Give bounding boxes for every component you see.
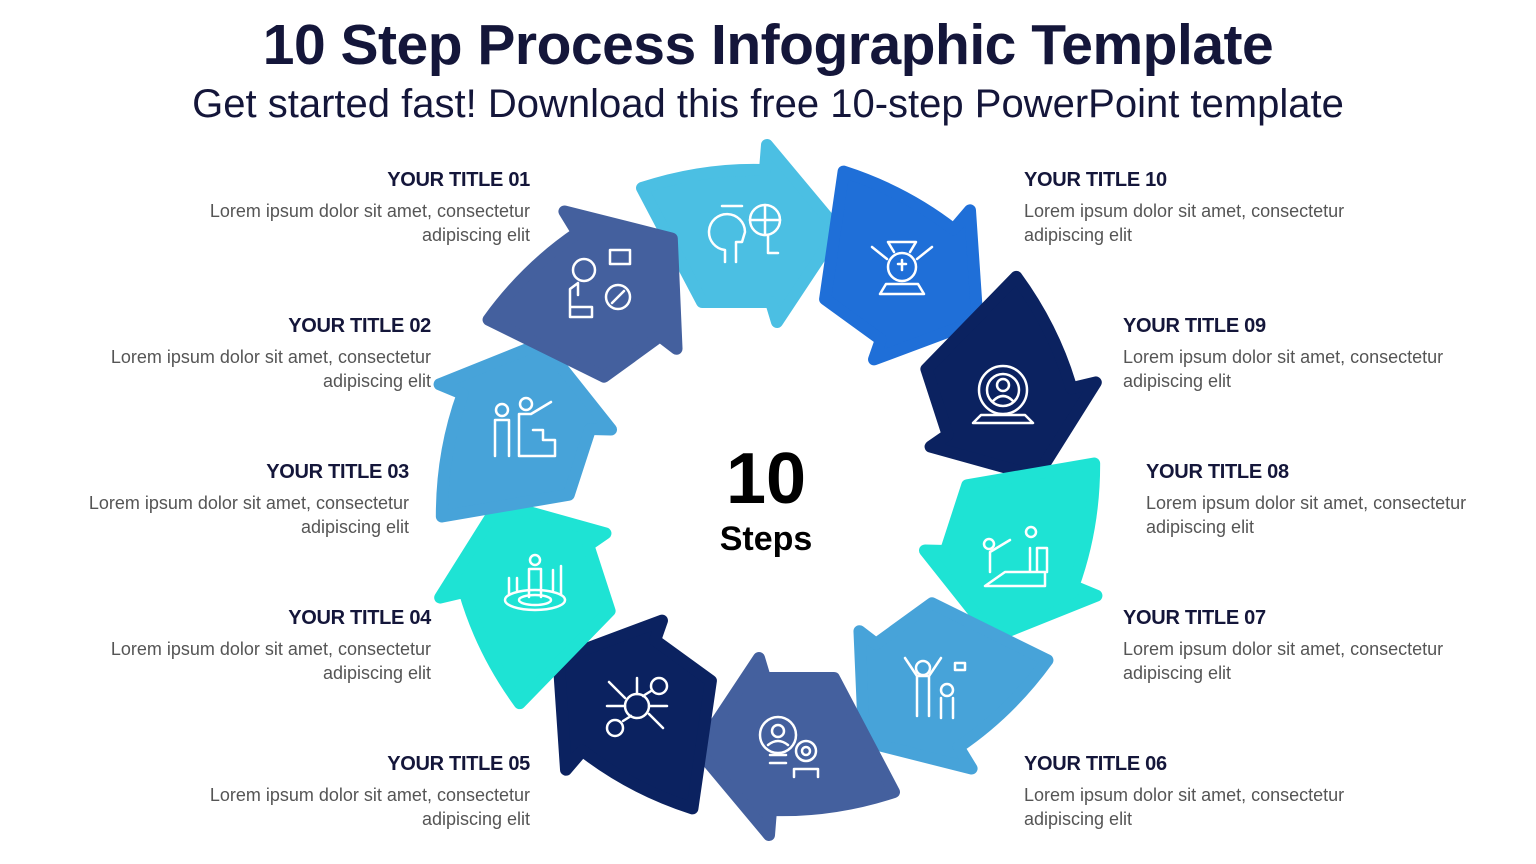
label 04: adipiscing elit — [323, 663, 431, 683]
arrow: cyan — [906, 422, 1135, 663]
label 08: Lorem ipsum dolor sit amet, consectetur — [1146, 493, 1466, 513]
label 02 — [111, 315, 431, 391]
label 02: adipiscing elit — [323, 371, 431, 391]
icon: target person — [505, 555, 565, 610]
label 05 — [210, 753, 530, 829]
label 01: YOUR TITLE 01 — [387, 169, 530, 191]
label 09: Lorem ipsum dolor sit amet, consectetur — [1123, 347, 1443, 367]
icon: award badge — [973, 366, 1033, 423]
center text: 10: 10 — [726, 439, 806, 519]
label 09: adipiscing elit — [1123, 371, 1231, 391]
label 05: adipiscing elit — [422, 809, 530, 829]
arrow: mid blue — [810, 552, 1073, 810]
label 05: Lorem ipsum dolor sit amet, consectetur — [210, 785, 530, 805]
arrow: slate bottom — [698, 658, 894, 835]
label 07 — [1123, 607, 1443, 683]
center text: Steps: Steps — [720, 520, 812, 558]
label 04: YOUR TITLE 04 — [288, 607, 431, 629]
label 10 — [1024, 169, 1344, 245]
icon: people stairs — [495, 398, 555, 456]
icon: money bag target — [872, 242, 932, 294]
arrow: blue — [765, 137, 1027, 395]
arrow: cyan left — [418, 475, 647, 716]
label 06 — [1024, 753, 1344, 829]
arrow: light blue top — [642, 145, 838, 322]
label 08: YOUR TITLE 08 — [1146, 461, 1289, 483]
label 07: YOUR TITLE 07 — [1123, 607, 1266, 629]
label 03 — [89, 461, 409, 537]
label 07: Lorem ipsum dolor sit amet, consectetur — [1123, 639, 1443, 659]
title: 10 Step Process Infographic Template — [263, 13, 1273, 77]
label 09 — [1123, 315, 1443, 391]
label 10: Lorem ipsum dolor sit amet, consectetur — [1024, 201, 1344, 221]
label 09: YOUR TITLE 09 — [1123, 315, 1266, 337]
icon: money hands — [570, 250, 630, 317]
icon: help climb — [984, 527, 1047, 586]
icon: team celebration — [905, 658, 965, 718]
icon: network — [607, 678, 667, 736]
label 04 — [111, 607, 432, 683]
arrow: navy — [889, 264, 1118, 505]
label 10: adipiscing elit — [1024, 225, 1132, 245]
label 03: YOUR TITLE 03 — [266, 461, 409, 483]
label 02: YOUR TITLE 02 — [288, 315, 431, 337]
label 07: adipiscing elit — [1123, 663, 1231, 683]
label 06: YOUR TITLE 06 — [1024, 753, 1167, 775]
label 10: YOUR TITLE 10 — [1024, 169, 1167, 191]
label 06: Lorem ipsum dolor sit amet, consectetur — [1024, 785, 1344, 805]
label 02: Lorem ipsum dolor sit amet, consectetur — [111, 347, 431, 367]
label 06: adipiscing elit — [1024, 809, 1132, 829]
label 03: adipiscing elit — [301, 517, 409, 537]
icon: bulb gear — [760, 717, 818, 777]
icons — [495, 205, 1047, 777]
arrow: mid blue left — [401, 317, 630, 558]
label 01: adipiscing elit — [422, 225, 530, 245]
label 01 — [210, 169, 530, 245]
label 04: Lorem ipsum dolor sit amet, consectetur — [111, 639, 431, 659]
arrows — [401, 137, 1135, 843]
arrow: navy bottom-left — [509, 585, 771, 843]
label 05: YOUR TITLE 05 — [387, 753, 530, 775]
label 08: adipiscing elit — [1146, 517, 1254, 537]
subtitle: Get started fast! Download this free 10-step PowerPoint template — [192, 82, 1344, 126]
icon: head globe — [709, 205, 780, 262]
label 01: Lorem ipsum dolor sit amet, consectetur — [210, 201, 530, 221]
arrow: slate top-left — [463, 170, 726, 428]
label 03: Lorem ipsum dolor sit amet, consectetur — [89, 493, 409, 513]
label 08 — [1146, 461, 1466, 537]
